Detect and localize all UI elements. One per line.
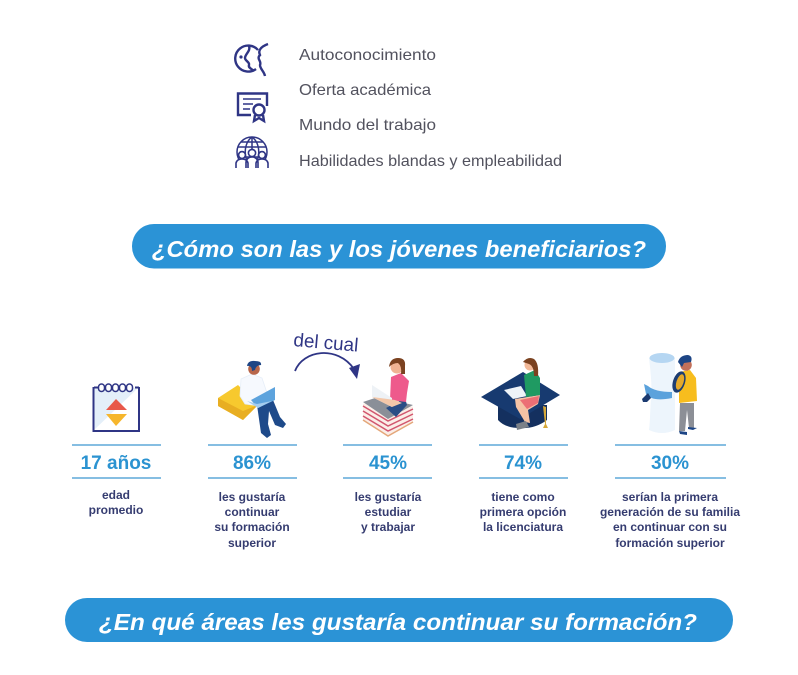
illustration: woman on books	[363, 358, 413, 436]
text: topics: Mundo del trabajo	[299, 117, 436, 134]
column: study and work: y trabajar	[361, 520, 415, 534]
column: age: 17 años	[81, 453, 151, 474]
column: first generation: en continuar con su	[613, 520, 727, 534]
column: first option: primera opción	[480, 505, 566, 519]
banner: profile heading: ¿Cómo son las y los jóvenes beneficiarios?	[152, 236, 646, 262]
column: age: edad	[102, 488, 130, 502]
column: first generation: serían la primera	[622, 490, 718, 504]
column: first generation: generación de su familia	[600, 505, 740, 519]
column: continue studies: su formación	[214, 520, 290, 534]
column: first option: la licenciatura	[483, 520, 563, 534]
illustration: man with laptop on block	[218, 361, 286, 438]
column: continue studies: continuar	[225, 505, 280, 519]
text: topics: Autoconocimiento	[299, 47, 436, 64]
column: study and work: 45%	[369, 453, 407, 474]
column: first generation: formación superior	[615, 536, 725, 550]
icon: certificate	[238, 94, 267, 121]
column: first generation: 30%	[651, 453, 689, 474]
text: topics: Habilidades blandas y empleabilidad	[299, 153, 562, 170]
column: study and work: estudiar	[365, 505, 412, 519]
banner: profile heading	[132, 224, 666, 268]
column: continue studies: superior	[228, 536, 276, 550]
column: first generation	[600, 353, 740, 550]
column: continue studies: 86%	[233, 453, 271, 474]
column: first option	[479, 358, 568, 534]
icon: globe with people	[236, 137, 268, 168]
icon: calendar	[94, 384, 139, 431]
text: topics: Oferta académica	[299, 82, 431, 99]
column: first option: tiene como	[491, 490, 555, 504]
column: age: promedio	[89, 503, 143, 517]
illustration: boy with diploma	[642, 353, 697, 435]
arrow: del cual: del cual	[293, 330, 359, 357]
column: study and work	[343, 358, 432, 534]
arrow: del cual	[293, 330, 360, 379]
text: topics	[299, 47, 562, 170]
icon: self-knowledge	[235, 44, 268, 76]
illustration: woman on graduation cap	[481, 358, 560, 430]
column: age	[72, 384, 161, 517]
banner: areas heading	[65, 598, 733, 642]
column: continue studies: les gustaría	[219, 490, 286, 504]
banner: areas heading: ¿En qué áreas les gustaría continuar su formación?	[99, 609, 697, 635]
column: continue studies	[208, 361, 297, 550]
column: study and work: les gustaría	[355, 490, 422, 504]
column: first option: 74%	[504, 453, 542, 474]
list of topics	[235, 44, 562, 170]
